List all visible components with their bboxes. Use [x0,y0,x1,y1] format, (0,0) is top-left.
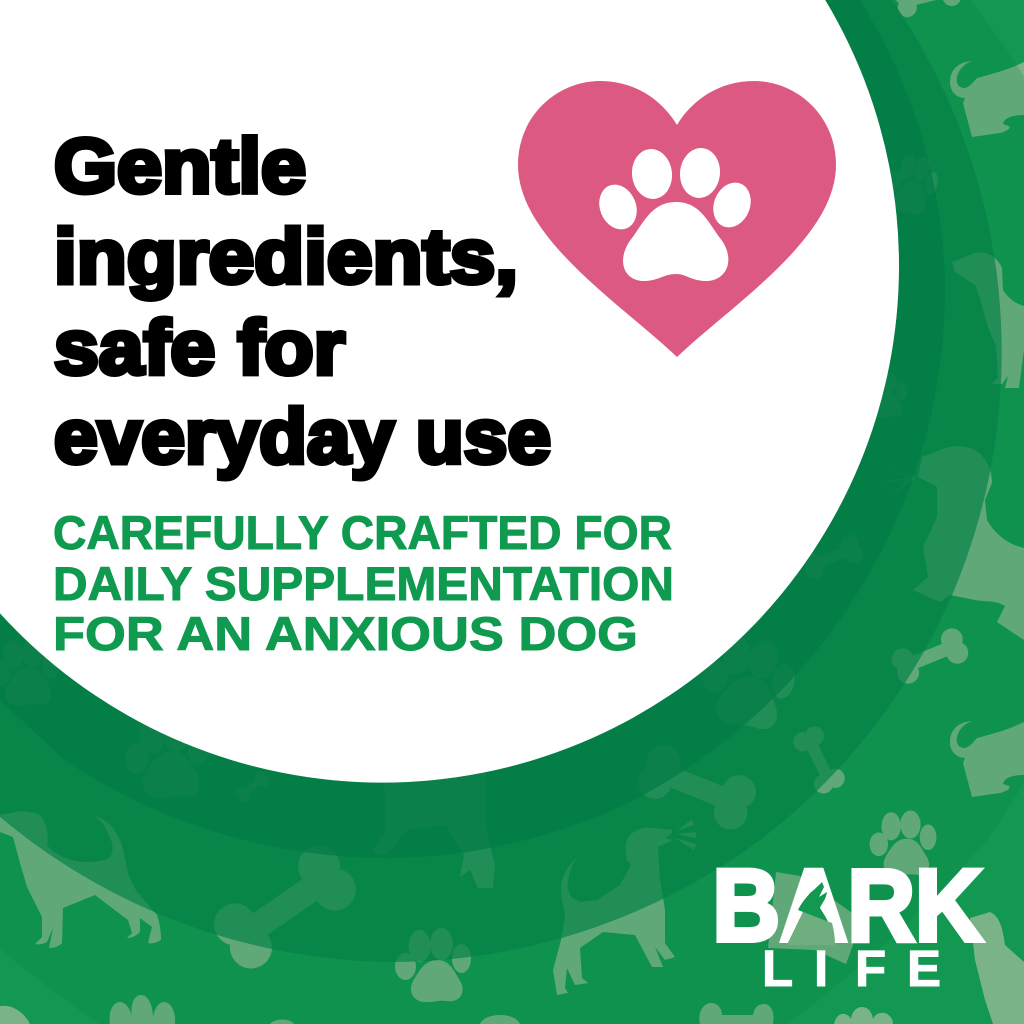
dog bottom right [970,912,1024,1024]
bone cut by bottom edge [699,1003,774,1024]
headline [54,124,551,480]
headline: ingredients, [54,214,518,300]
bark lines right large dog [872,468,915,498]
dog rear middle right [950,721,1024,797]
paw cut by bottom edge, centre [480,1015,520,1024]
icon: howling dog cutout [787,882,835,945]
paws [395,928,471,1002]
paw cut by bottom edge, far left [0,1006,30,1024]
dog silhouette behind white circle [373,770,495,888]
headline: Gentle [54,124,306,210]
dog silhouette right large [913,446,1024,640]
bark lines bottom centre dog [675,819,696,850]
subheading: DAILY SUPPLEMENTATION [53,557,674,610]
headline: everyday use [54,394,551,480]
bones [206,837,364,977]
subheading [53,506,674,660]
paw cut by bottom edge, lower left [270,1020,294,1024]
subheading: CAREFULLY CRAFTED FOR [53,506,672,559]
white circle panel [0,0,899,783]
ring: inner band [0,0,945,858]
paw toes cut by bottom edge, centre left [110,995,175,1024]
paw toes cut by bottom edge, right [834,1007,893,1024]
dog silhouette lower left [0,811,161,948]
logo: Bark Life: BARK [712,848,982,962]
dog silhouette bottom centre [553,828,675,995]
headline: safe for [54,305,345,391]
dog silhouette right upper [952,252,1024,388]
dog behind logo [768,872,862,964]
logo: Bark Life: LIFE [762,940,941,997]
dog rear top right [950,61,1024,137]
subheading: FOR AN ANXIOUS DOG [53,607,638,660]
icon: heart with paw [518,81,836,357]
